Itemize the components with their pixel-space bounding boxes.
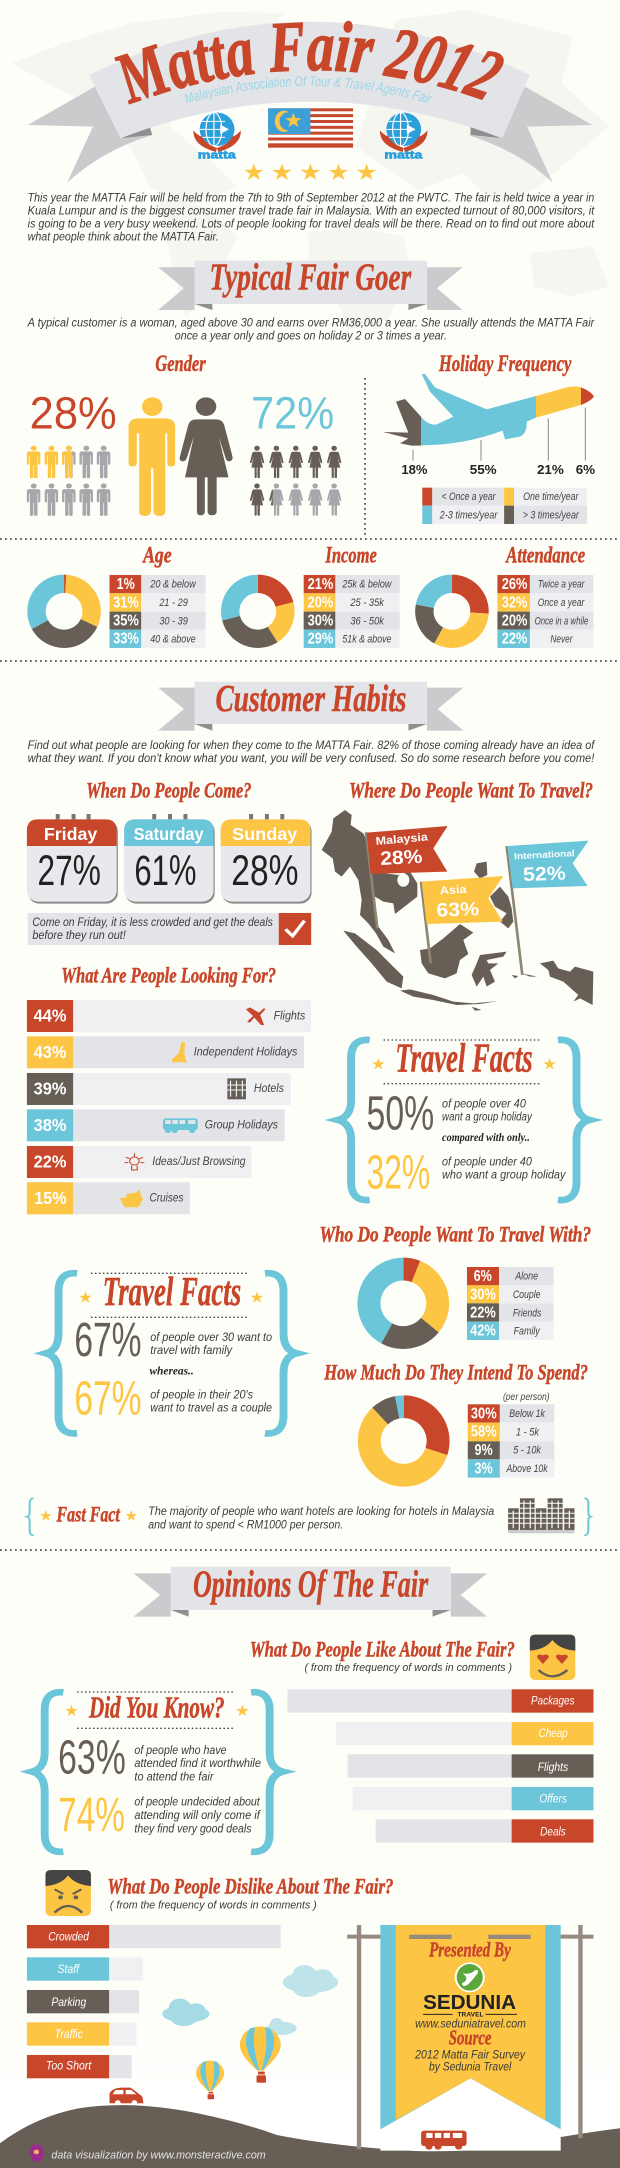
callout: did you know [32,1691,283,1852]
callout: travel facts (group holiday): of people over 40 [442,1097,526,1110]
callout: travel facts (family): of people in their 20's [150,1388,253,1401]
ribbon: title banner [28,22,592,183]
calendar: Sunday [221,814,312,904]
callout: travel facts (family): whereas.. [149,1365,194,1377]
icon: ship [120,1189,143,1207]
table: attendance: 26% [502,575,527,593]
brace: left [32,1692,63,1852]
presented by banner [347,1925,593,2151]
brace: left [46,1273,77,1433]
panel: age: Age [142,542,172,568]
bar chart: dislikes: Crowded [48,1930,89,1943]
brace: right [265,1273,297,1433]
icon: plane [246,1007,265,1025]
dotted divider lines [0,378,620,1550]
panel: holiday frequency [401,350,595,524]
table: spend: 58% [471,1423,497,1440]
logo: Sedunia [455,1962,485,1992]
callout: travel facts (group holiday) [338,1034,590,1200]
callout: travel facts (group holiday): of people under 40 [442,1155,532,1168]
table: age: 35% [113,612,139,629]
table: income: 25 - 35k [350,596,385,609]
callout: travel facts (family): 67% [74,1313,142,1367]
bar: group holidays [27,1109,285,1141]
ribbon heading: Opinions Of The Fair: Opinions Of The Fair [193,1564,429,1606]
icon: MATTA logo right [380,113,427,161]
table: travel with: Alone [514,1270,538,1282]
flag: Asia 63%: 63% [436,899,479,922]
callout: fast fact [27,1498,591,1535]
hill [0,2105,620,2168]
table: income: 21% [308,575,333,593]
bar: ideas / browsing [27,1146,251,1178]
table: age: 30 - 39 [159,614,188,627]
presented by banner: 2012 Matta Fair Survey [414,2047,526,2061]
bar: flights: 44% [34,1007,67,1026]
icon: balloon large front [240,2027,281,2083]
icon: happy face [530,1635,575,1680]
presented by banner: Presented By [428,1938,511,1962]
flag: Asia 63%: Asia [440,884,468,897]
big man icon [129,397,175,516]
panel: income [230,542,400,648]
flag: Malaysia 28%: 28% [380,847,423,870]
icon: bus [421,2131,467,2150]
icon: car [110,2088,144,2105]
donut chart: attendance [424,584,480,639]
table: income: 36 - 50k [350,614,385,627]
customer habits section [27,678,595,945]
plane chart values: 18% [401,462,427,477]
icon: hotels skyline [508,1498,575,1533]
flag: Malaysia 28% [366,826,448,928]
heading: what are people looking for: What Are People Looking For? [61,964,276,988]
table: attendance: 32% [502,594,527,611]
title: Matta Fair 2012 [114,20,504,104]
presented by banner: by Sedunia Travel [429,2060,512,2073]
callout: did you know: attended find it worthwhile [134,1756,261,1770]
presented by banner: TRAVEL [457,2012,484,2018]
subheading: from frequency: ( from the frequency of words in comments ) [110,1898,317,1911]
callout: come on Friday [28,913,311,945]
table: spend: 9% [474,1441,493,1459]
icon: light bulb [125,1153,144,1170]
table: attendance: Never [550,632,573,645]
note: per person: (per person) [503,1392,550,1403]
callout: fast fact: Fast Fact [56,1502,121,1527]
bar chart: likes [287,1689,593,1843]
bar: hotels [27,1073,291,1105]
small men pictogram [27,446,110,516]
callout: did you know: attending will only come if [134,1808,261,1822]
icon: angry face [45,1870,91,1916]
flag: International 52% [507,841,589,975]
footer credit: data visualization by www.monsteractive.com [51,2149,266,2161]
bar: independent holidays: 43% [34,1043,67,1063]
calendar: Saturday: 61% [134,847,197,894]
plane chart values: 6% [576,462,595,477]
customer habits text [28,738,595,765]
legend: > 3 times/year [523,509,580,521]
presented by banner: www.seduniatravel.com [415,2016,526,2030]
table: spend [468,1404,554,1478]
flag: Malaysia 28%: Malaysia [375,831,429,848]
callout: travel facts (family): want to travel as a couple [150,1401,272,1414]
cloud behind large balloon [267,2018,297,2035]
intro text [28,191,595,243]
legend: 2-3 times/year [439,509,498,521]
bar chart: dislikes: Traffic [55,2027,83,2041]
lower page white fade [0,2030,620,2168]
ribbon heading: Typical Fair Goer [158,256,463,310]
callout: travel facts (group holiday): 50% [367,1086,434,1140]
table: age: 1% [117,575,135,593]
table: travel with: 22% [470,1304,496,1321]
calendar: Sunday: 28% [231,847,299,894]
bar: flights [27,1000,311,1032]
panel: who to travel with [319,1223,591,1340]
map land [322,810,593,1011]
table: attendance: Twice a year [538,578,585,590]
who and spend section [27,1223,591,1535]
callout: come on Friday: Come on Friday, it is less crowded and get the deals [32,915,273,929]
callout: fast fact: and want to spend < RM1000 per person. [148,1517,343,1531]
callout: travel facts (family) [46,1268,297,1433]
callout: did you know: of people undecided about [134,1795,261,1808]
bar chart: dislikes: Too Short [46,2059,92,2072]
panel: gender: Gender [155,350,206,376]
bar chart: likes: Flights [538,1760,569,1774]
bar: hotels: 39% [34,1080,67,1099]
calendar: Friday: 27% [38,847,101,894]
calendar: Sunday: Sunday [232,825,298,845]
callout: did you know: to attend the fair [134,1769,214,1783]
ribbon heading: Customer Habits [158,678,463,731]
panel: gender: 28% [30,388,117,438]
bar: flights: Flights [274,1008,305,1022]
flag: International 52%: International [514,848,575,861]
subtitle: Malaysian Association Of Tour & Travel Agents Fair [184,76,432,103]
table: age: 40 & above [150,632,196,645]
bar: cruises: Cruises [149,1191,184,1204]
table: age: 31% [113,594,139,611]
opinions section [32,1564,593,1852]
panel: gender: 72% [251,388,334,438]
flag: International 52%: 52% [523,864,566,886]
table: income: 20% [308,594,333,611]
map: Southeast Asia with flags [322,810,593,1011]
calendar: Saturday [124,814,215,904]
callout: travel facts (family): travel with family [150,1343,233,1357]
ribbon heading: Customer Habits: Customer Habits [215,678,406,720]
panel: how much to spend [324,1360,588,1478]
calendar: Friday: Friday [44,825,98,845]
presented by banner: Source [449,2026,491,2050]
icon: hotel [227,1078,246,1099]
looking for section [27,964,590,1214]
header section [27,20,595,342]
plane chart values: 55% [470,462,497,477]
big woman icon [180,397,233,515]
icon: monster [30,2143,44,2162]
bar: cruises: 15% [34,1189,67,1209]
table: travel with: 30% [470,1286,496,1303]
bar: group holidays: Group Holidays [205,1118,278,1131]
callout: travel facts (group holiday): 32% [367,1145,430,1199]
callout: fast fact: The majority of people who want hotels are looking for hotels in Malaysia [148,1504,495,1518]
bar chart: likes: Packages [531,1693,575,1707]
heading: when do people come: When Do People Come? [86,778,251,803]
table: attendance: Once a year [538,596,585,609]
callout: travel facts (family): 67% [74,1371,142,1425]
donut chart: income [230,584,285,639]
panel: income: Income [325,542,377,568]
table: age: 21 - 29 [159,596,188,609]
table: travel with: Couple [513,1288,541,1301]
table: income [304,575,400,648]
icon: Malaysian flag [268,108,353,148]
legend [422,488,587,524]
brace: right [558,1040,590,1200]
table: travel with: 42% [470,1322,496,1339]
dislikes section [0,1870,620,2168]
icon: beach figure [172,1042,187,1063]
donut chart: age [36,584,92,639]
typical customer text: once a year only and goes on holiday 2 or 3 times a year. [175,329,447,342]
callout: did you know: they find very good deals [134,1821,252,1835]
bar: group holidays: 38% [34,1116,67,1136]
callout: did you know: 63% [58,1730,126,1784]
table: income: 30% [308,612,333,629]
calendar: Friday [27,814,118,904]
bar: hotels: Hotels [254,1081,284,1095]
table: spend: Below 1k [509,1407,546,1420]
callout: travel facts (group holiday): compared with only.. [442,1131,530,1144]
icon: MATTA logo left: matta [198,148,236,161]
table: travel with [467,1267,554,1340]
callout: did you know: Did You Know? [88,1691,225,1725]
table: age: 33% [113,630,139,647]
flag: Asia 63% [421,876,503,963]
table: age [110,575,206,648]
donut chart: travel with [369,1269,438,1338]
table: income: 25k & below [342,578,392,590]
brace: right [251,1692,283,1852]
bar: cruises [27,1182,190,1214]
bar: ideas / browsing: Ideas/Just Browsing [152,1154,246,1168]
typical fair goer panels [27,350,595,648]
icon: balloon small [196,2061,224,2099]
panel: age [36,542,206,648]
callout: travel facts (family): of people over 30 want to [150,1330,272,1344]
table: travel with: Family [514,1325,540,1337]
table: spend: Above 10k [506,1462,548,1475]
table: spend: 3% [474,1460,493,1477]
icon: bus [163,1118,198,1133]
legend: < Once a year [442,491,496,503]
bar: independent holidays: Independent Holidays [194,1045,298,1058]
icon: five stars [244,164,376,180]
ribbon heading: Opinions Of The Fair [134,1564,487,1617]
callout: travel facts (group holiday): want a group holiday [442,1110,533,1123]
plane chart values [401,462,595,477]
background world map [12,10,609,330]
panel: gender [27,350,341,516]
typical customer text [27,316,595,342]
plane chart [383,374,594,461]
table: attendance: 20% [502,612,527,629]
bar chart: likes: Deals [540,1825,566,1838]
panel: attendance [424,542,593,648]
callout: did you know: of people who have [134,1743,227,1757]
table: attendance: 22% [502,630,527,647]
bar chart: dislikes [27,1925,281,2078]
small women pictogram [250,446,341,516]
subheading: from frequency: ( from the frequency of words in comments ) [304,1661,512,1674]
table: income: 51k & above [342,632,392,645]
calendar: Saturday: Saturday [134,825,204,845]
callout: travel facts (family): Travel Facts [103,1268,241,1314]
callout: did you know: 74% [58,1788,125,1842]
icon: balloon large [240,2027,281,2083]
intro text: what people think about the MATTA Fair. [28,230,219,243]
heading: what do people dislike: What Do People Dislike About The Fair? [108,1874,393,1899]
icon: MATTA logo left [193,113,241,161]
table: income: 29% [308,630,333,647]
bar chart: dislikes: Staff [57,1962,80,1976]
plane chart values: 21% [537,462,564,477]
table: travel with: Friends [513,1306,541,1319]
table: age: 20 & below [149,578,197,590]
ribbon heading: Typical Fair Goer: Typical Fair Goer [210,256,412,298]
clouds [162,1965,338,2026]
legend: One time/year [523,491,579,503]
table: spend: 5 - 10k [513,1444,542,1456]
bar chart: likes: Cheap [539,1726,568,1740]
callout: travel facts (group holiday): who want a group holiday [442,1167,566,1181]
donut chart: spend [369,1407,438,1475]
table: attendance [497,575,593,648]
bar: independent holidays [27,1036,304,1068]
balloons [196,2027,281,2099]
brace: left [338,1040,370,1200]
bar chart: likes: Offers [539,1792,567,1805]
bar: ideas / browsing: 22% [34,1153,67,1172]
table: spend: 30% [471,1405,497,1422]
table: travel with: 6% [474,1267,492,1285]
icon: MATTA logo right: matta [384,148,422,161]
presented by banner: SEDUNIA [423,1990,516,2014]
bar chart: dislikes: Parking [51,1995,87,2009]
table: spend: 1 - 5k [516,1426,540,1438]
callout: come on Friday: before they run out! [32,928,126,942]
